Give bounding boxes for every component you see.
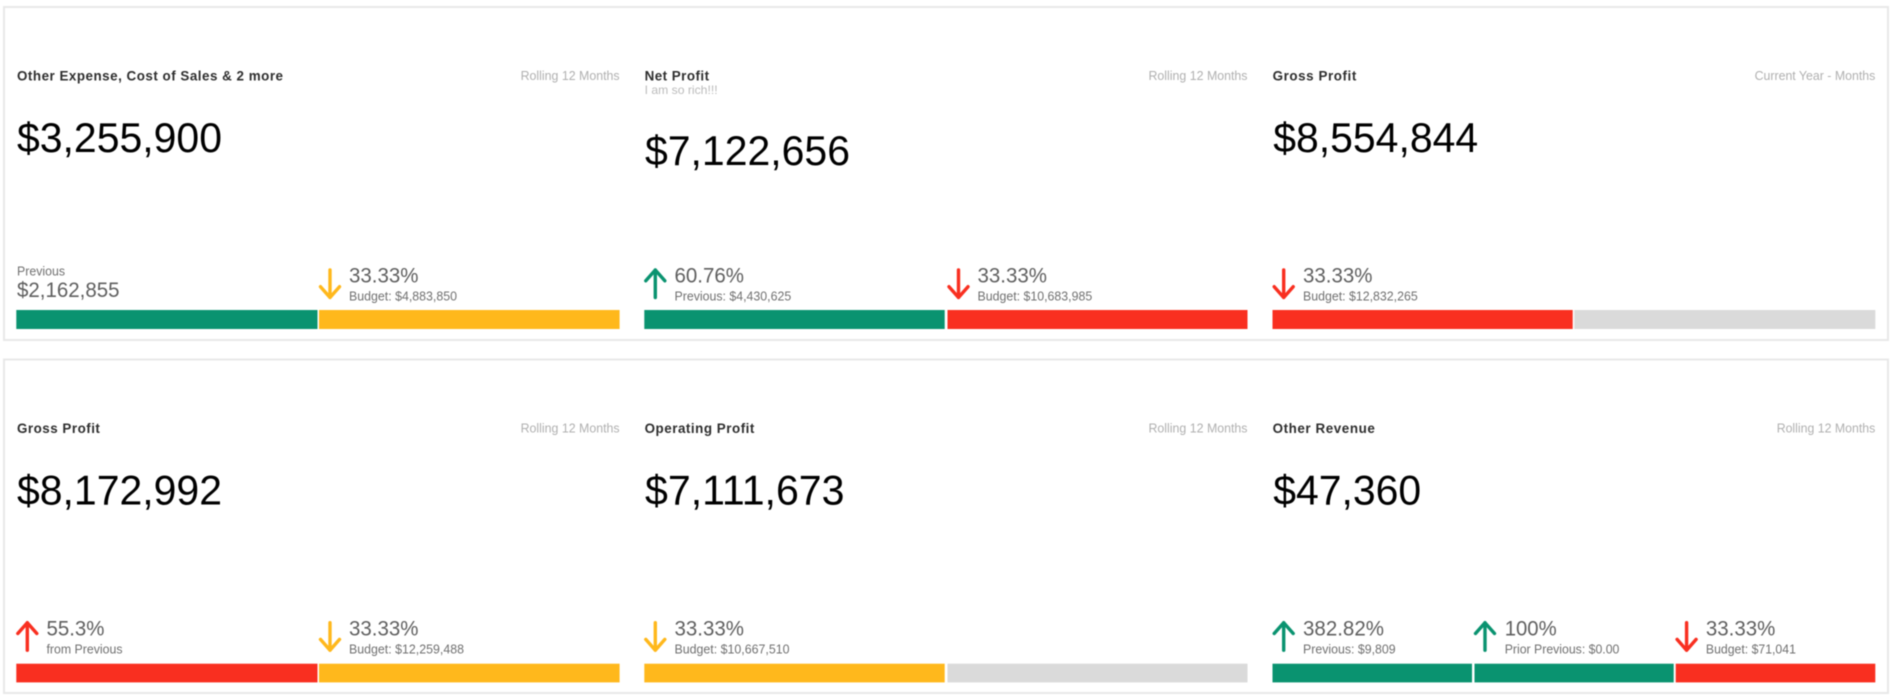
period label: Rolling 12 Months [1148, 421, 1248, 436]
previous text: from Previous [46, 641, 123, 656]
period label: Rolling 12 Months [521, 421, 620, 436]
subtitle: I am so rich!!! [645, 83, 718, 97]
prior previous text: Prior Previous: $0.00 [1505, 641, 1619, 656]
icon: green up arrow [646, 270, 665, 298]
icon: yellow down arrow [320, 623, 340, 650]
period label: Rolling 12 Months [1148, 68, 1248, 83]
budget text: Budget: $4,883,850 [349, 289, 457, 304]
budget text: Budget: $71,041 [1706, 641, 1796, 656]
icon: green up arrow [1274, 623, 1293, 650]
heading: Net Profit [645, 68, 710, 84]
previous percent: 55.3% [46, 617, 104, 640]
bar: yellow segment [319, 664, 620, 682]
previous value: $2,162,855 [17, 279, 120, 302]
main value: $7,122,656 [645, 127, 850, 174]
bar: green segment two [1474, 664, 1674, 682]
panel: bottom row [4, 360, 1888, 693]
bar: red segment [16, 664, 318, 682]
budget text: Budget: $10,667,510 [674, 641, 790, 656]
main value: $47,360 [1273, 467, 1421, 514]
budget percent: 33.33% [349, 617, 418, 640]
bar: red segment [1272, 310, 1573, 329]
budget percent: 33.33% [1706, 617, 1775, 640]
bar: red segment [1676, 664, 1875, 682]
card: operating profit [644, 421, 1248, 682]
main value: $8,554,844 [1273, 114, 1478, 161]
panel: top row [4, 7, 1888, 340]
icon: red down arrow [1677, 623, 1696, 650]
bar: yellow segment [319, 310, 620, 329]
previous text: Previous: $9,809 [1303, 641, 1396, 656]
card: gross profit rolling [16, 421, 620, 682]
budget percent: 33.33% [349, 265, 418, 288]
heading: Operating Profit [645, 421, 755, 436]
bar: green segment [16, 310, 318, 329]
bar: red segment [948, 310, 1248, 329]
icon: yellow down arrow [320, 270, 340, 298]
icon: green up arrow [1476, 623, 1494, 650]
budget percent: 33.33% [978, 265, 1047, 288]
heading: Gross Profit [1273, 68, 1357, 84]
budget percent: 33.33% [674, 617, 744, 640]
period label: Rolling 12 Months [521, 68, 620, 83]
bar: green segment one [1272, 664, 1472, 682]
card: other revenue [1272, 421, 1876, 682]
budget text: Budget: $10,683,985 [978, 289, 1092, 304]
icon: red down arrow [1274, 270, 1293, 298]
heading: Other Revenue [1273, 421, 1375, 436]
card: net profit [644, 68, 1248, 329]
bar: grey segment [1574, 310, 1875, 329]
previous text: Previous: $4,430,625 [674, 289, 791, 304]
heading: Gross Profit [17, 421, 100, 436]
bar: yellow segment [644, 664, 945, 682]
previous percent: 60.76% [674, 265, 744, 288]
main value: $3,255,900 [17, 114, 222, 161]
prior previous percent: 100% [1505, 617, 1557, 640]
period label: Current Year - Months [1755, 68, 1876, 83]
heading: Other Expense, Cost of Sales & 2 more [17, 68, 283, 84]
budget percent: 33.33% [1303, 265, 1372, 288]
previous label: Previous [17, 264, 65, 279]
bar: green segment [644, 310, 945, 329]
budget text: Budget: $12,832,265 [1303, 289, 1418, 304]
icon: red up arrow [18, 623, 37, 650]
previous percent: 382.82% [1303, 617, 1384, 640]
icon: red down arrow [949, 270, 968, 298]
card: other expense [16, 68, 620, 329]
card: gross profit current year [1272, 68, 1876, 329]
icon: yellow down arrow [646, 623, 665, 650]
period label: Rolling 12 Months [1777, 421, 1876, 436]
main value: $8,172,992 [17, 467, 222, 514]
main value: $7,111,673 [645, 467, 844, 514]
budget text: Budget: $12,259,488 [349, 641, 464, 656]
bar: grey segment [948, 664, 1248, 682]
